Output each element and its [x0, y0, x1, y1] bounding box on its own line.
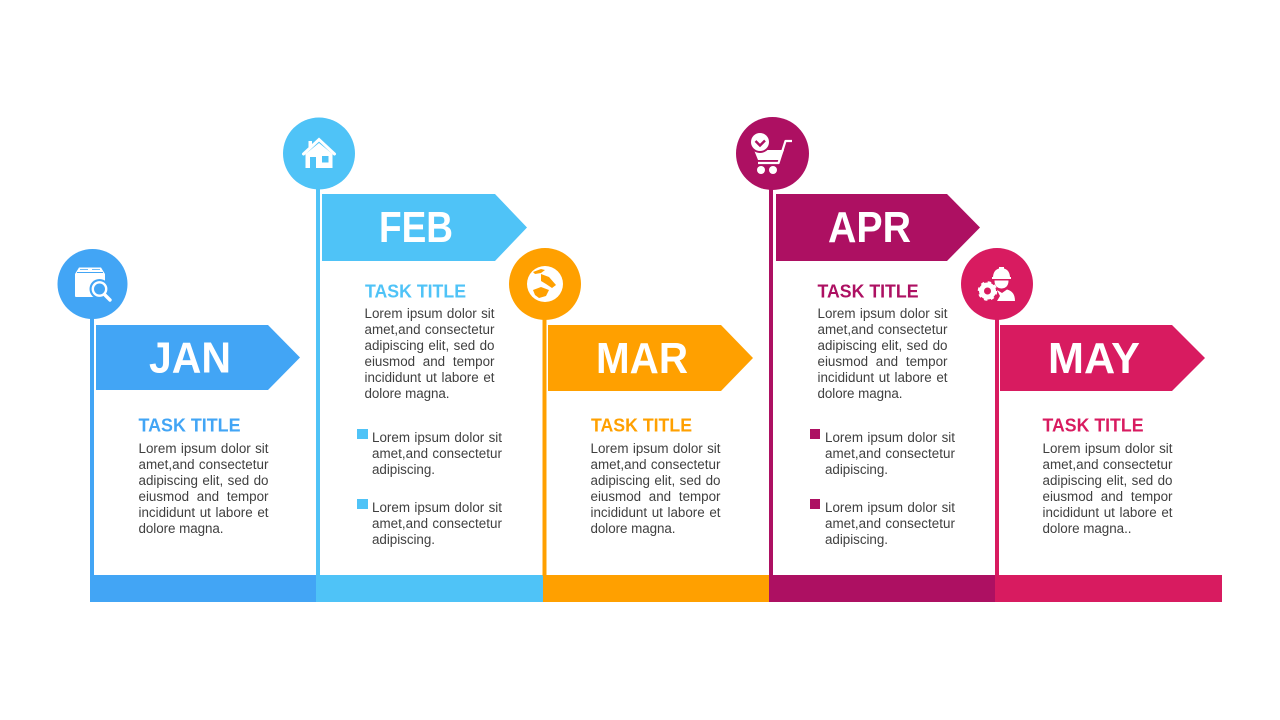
bullet 2: FEB: amet,and consectetur	[372, 516, 503, 531]
arrow: APR	[776, 194, 980, 261]
month: MAY: MAY	[1048, 334, 1140, 383]
body text: MAR: eiusmod and tempor	[590, 489, 721, 504]
icon: shopping cart with check	[749, 131, 792, 174]
body text: APR: eiusmod and tempor	[818, 354, 948, 369]
body text: APR: adipiscing elit, sed do	[818, 338, 948, 353]
body text: FEB: adipiscing elit, sed do	[364, 338, 494, 353]
base bar: MAR	[543, 575, 769, 602]
icon: worker with gear	[979, 267, 1015, 301]
body text: MAY: amet,and consectetur	[1042, 457, 1173, 472]
body text: MAY	[1042, 441, 1173, 536]
month: MAR: MAR	[596, 334, 688, 383]
circle: FEB	[283, 118, 355, 190]
body text: FEB: Lorem ipsum dolor sit	[364, 306, 495, 321]
bullet 1: FEB: Lorem ipsum dolor sit	[372, 430, 502, 445]
arrow: FEB	[322, 194, 527, 261]
body text: MAY: incididunt ut labore et	[1042, 505, 1173, 520]
body text: FEB: incididunt ut labore et	[364, 370, 495, 385]
bullet 1: APR	[810, 429, 956, 477]
arrow: JAN	[96, 325, 300, 390]
body text: JAN: adipiscing elit, sed do	[138, 473, 268, 488]
arrow: MAY	[1000, 325, 1205, 391]
base bar: APR	[769, 575, 995, 602]
month: APR: APR	[828, 203, 911, 252]
bullet 1: APR: amet,and consectetur	[825, 446, 956, 461]
panel: FEB	[283, 118, 543, 602]
body text: MAY: adipiscing elit, sed do	[1042, 473, 1172, 488]
body text: APR: Lorem ipsum dolor sit	[818, 306, 948, 321]
panel: MAR	[509, 248, 769, 602]
bullet 1: APR: Lorem ipsum dolor sit	[825, 430, 955, 445]
month: JAN: JAN	[149, 334, 231, 382]
arrow: MAR	[548, 325, 753, 391]
panel: APR	[736, 117, 995, 602]
bullet 2: APR: Lorem ipsum dolor sit	[825, 500, 955, 515]
circle: MAY	[961, 248, 1033, 320]
stem: MAY	[995, 316, 999, 576]
panel: JAN	[58, 249, 316, 602]
circle: APR	[736, 117, 809, 190]
body text: APR: amet,and consectetur	[818, 322, 948, 337]
body text: FEB: amet,and consectetur	[364, 322, 495, 337]
bullet 2: FEB	[357, 499, 503, 547]
task title: APR: TASK TITLE	[818, 282, 918, 302]
icon: globe	[527, 266, 563, 302]
body text: JAN: eiusmod and tempor	[138, 489, 269, 504]
body text: JAN: Lorem ipsum dolor sit	[138, 441, 269, 456]
bullet 1: FEB: amet,and consectetur	[372, 446, 503, 461]
body text: JAN	[138, 441, 269, 536]
bullet 2: FEB: adipiscing.	[372, 532, 435, 547]
circle: MAR	[509, 248, 581, 320]
body text: APR: dolore magna.	[818, 386, 902, 401]
icon: house	[304, 140, 334, 168]
body text: MAR: amet,and consectetur	[590, 457, 721, 472]
bullet 2: APR: adipiscing.	[825, 532, 888, 547]
task title: JAN: TASK TITLE	[138, 416, 240, 436]
body text: FEB: eiusmod and tempor	[364, 354, 495, 369]
base bar: FEB	[316, 575, 543, 602]
body text: FEB	[364, 306, 495, 401]
body text: JAN: incididunt ut labore et	[138, 505, 269, 520]
circle: JAN	[58, 249, 128, 319]
bullet 2: FEB: Lorem ipsum dolor sit	[372, 500, 502, 515]
body text: MAR: Lorem ipsum dolor sit	[590, 441, 721, 456]
base bar: JAN	[90, 575, 316, 602]
panel: MAY	[961, 248, 1222, 602]
stem: FEB	[316, 185, 320, 576]
body text: MAY: Lorem ipsum dolor sit	[1042, 441, 1173, 456]
bullet 2: APR: amet,and consectetur	[825, 516, 956, 531]
body text: MAR: dolore magna.	[590, 521, 676, 536]
bullet 1: APR: adipiscing.	[825, 462, 888, 477]
bullet 1: FEB	[357, 429, 503, 477]
body text: APR: incididunt ut labore et	[818, 370, 948, 385]
task title: FEB: TASK TITLE	[365, 282, 466, 302]
stem: APR	[769, 185, 773, 576]
body text: JAN: dolore magna.	[138, 521, 224, 536]
stem: MAR	[542, 316, 546, 576]
stem: JAN	[90, 316, 94, 576]
body text: JAN: amet,and consectetur	[138, 457, 269, 472]
body text: MAR	[590, 441, 721, 536]
body text: MAR: incididunt ut labore et	[590, 505, 721, 520]
body text: MAY: dolore magna..	[1042, 521, 1132, 536]
body text: FEB: dolore magna.	[364, 386, 450, 401]
task title: MAY: TASK TITLE	[1042, 416, 1144, 436]
body text: APR	[818, 306, 948, 401]
bullet 1: FEB: adipiscing.	[372, 462, 435, 477]
body text: MAY: eiusmod and tempor	[1042, 489, 1173, 504]
task title: MAR: TASK TITLE	[591, 416, 692, 436]
month: FEB: FEB	[379, 203, 453, 252]
base bar: MAY	[995, 575, 1222, 602]
body text: MAR: adipiscing elit, sed do	[590, 473, 720, 488]
icon: box with magnifier	[75, 268, 110, 300]
bullet 2: APR	[810, 499, 956, 547]
